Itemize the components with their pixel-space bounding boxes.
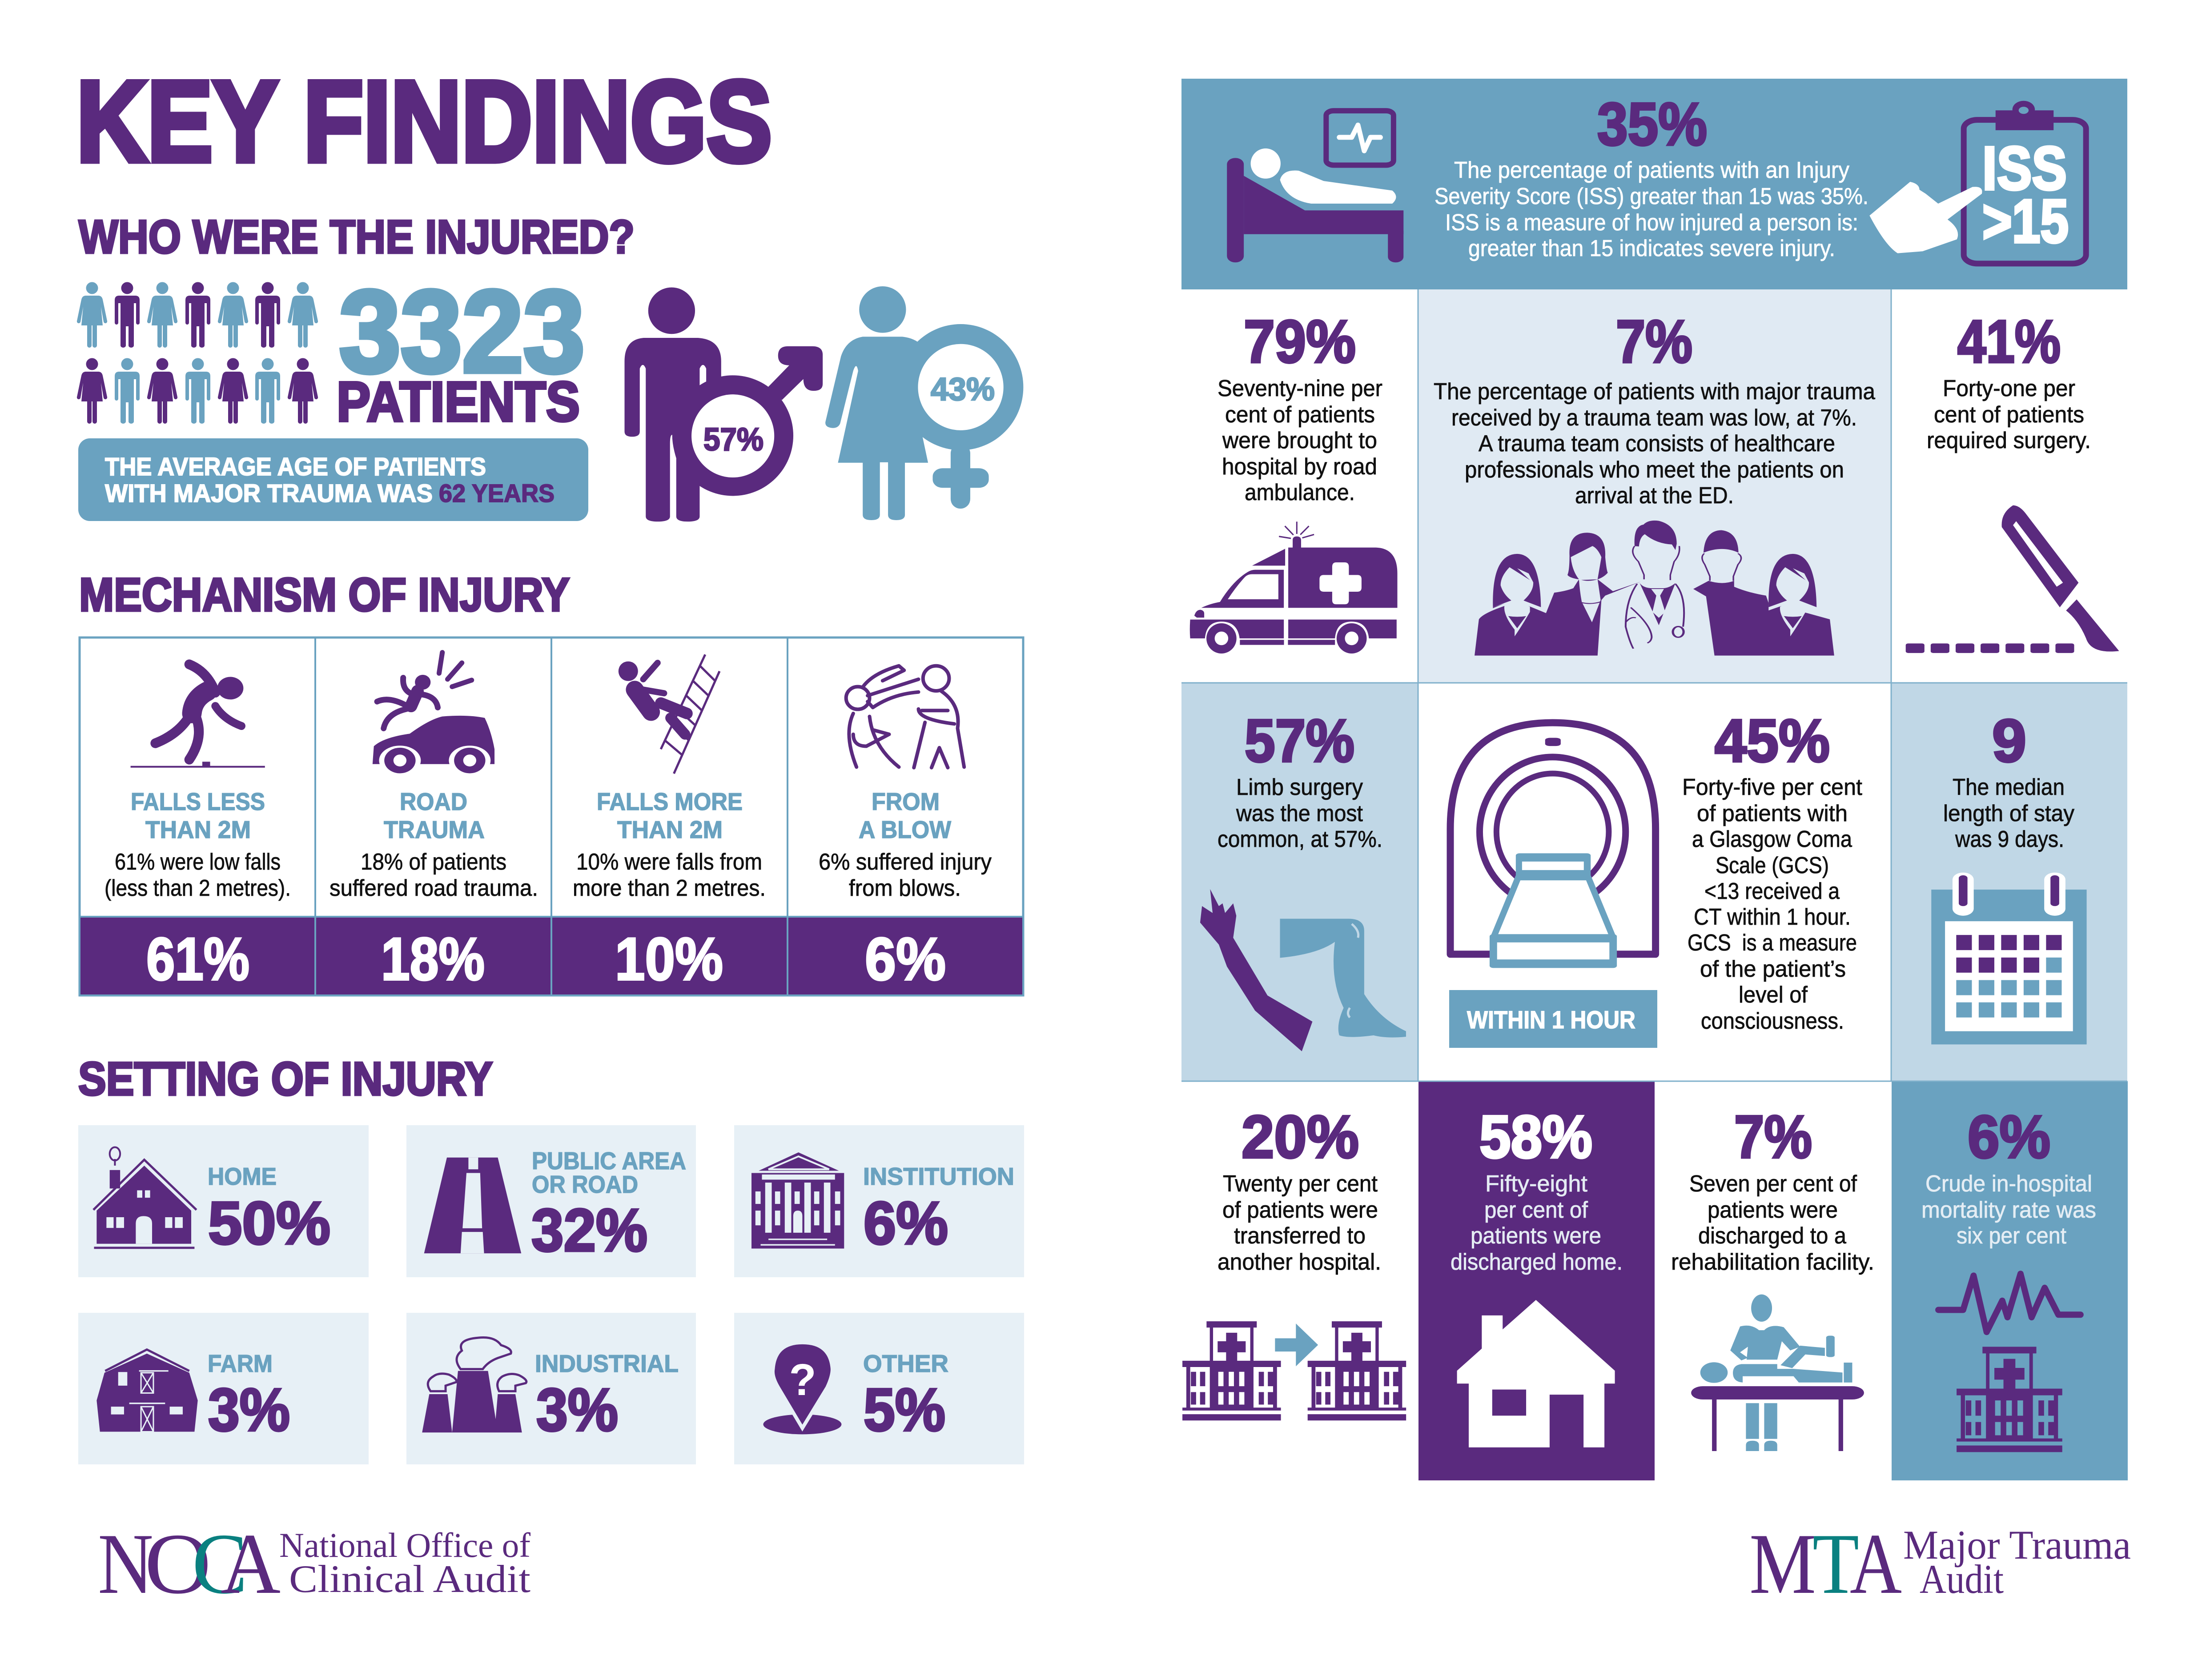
text: CT description: a Glasgow Coma — [1692, 826, 1852, 852]
column text: from a blow — [819, 788, 992, 901]
card: public area or road — [406, 1125, 696, 1277]
icon: clipboard ISS >15 — [1869, 101, 2086, 264]
mechanism percentages: 6% — [865, 925, 946, 993]
card: other: OTHER — [863, 1350, 948, 1377]
text: limb surgery description — [1218, 774, 1382, 852]
text: transfer description: of patients were — [1222, 1197, 1378, 1223]
text: discharged home description — [1451, 1171, 1623, 1275]
logo: NOCA: C — [192, 1516, 248, 1612]
panel: 20% transferred — [1182, 1103, 1406, 1420]
text: ambulance description: ambulance. — [1245, 480, 1355, 505]
panel: 79% ambulance: 79% — [1244, 308, 1356, 375]
heading: who were the injured: WHO WERE THE INJURED? — [79, 211, 635, 263]
card: industrial — [406, 1313, 696, 1464]
text: discharged home description: patients were — [1471, 1223, 1601, 1249]
icon: road trauma — [373, 653, 494, 775]
mechanism percentages — [146, 925, 946, 993]
card: public area or road: 32% — [531, 1196, 647, 1264]
text: CT description: GCS is a measure — [1688, 930, 1857, 956]
panel: 58% discharged home: 58% — [1479, 1103, 1592, 1171]
pictogram: rows of patients — [77, 282, 318, 424]
text: transfer description — [1218, 1171, 1381, 1275]
title: KEY FINDINGS — [76, 57, 772, 185]
column text: from a blow: FROM — [872, 788, 940, 815]
mechanism percentages: 61% — [146, 925, 249, 993]
icon: ambulance — [1190, 521, 1397, 654]
text: ISS description: The percentage of patients with an Injury — [1454, 157, 1849, 183]
icon: a blow — [846, 666, 964, 768]
text: discharged home description: per cent of — [1484, 1197, 1588, 1223]
logo: MTA: T — [1812, 1516, 1859, 1612]
logo: NOCA: O — [145, 1516, 211, 1612]
card: institution — [734, 1125, 1024, 1277]
label: within 1 hour — [1449, 990, 1657, 1048]
text: trauma team description: professionals who meet the patients on — [1465, 457, 1844, 483]
text: discharged home description: Fifty-eight — [1485, 1171, 1588, 1197]
text: CT description: Forty-five per cent — [1682, 774, 1863, 800]
column text: falls less than 2m: (less than 2 metres). — [104, 875, 291, 901]
icon: ECG trace and hospital — [1938, 1274, 2081, 1452]
text: trauma team description: The percentage of patients with major trauma — [1434, 379, 1875, 405]
card: farm — [78, 1313, 369, 1464]
card: farm: 3% — [208, 1376, 290, 1443]
icon: CT scanner — [1451, 723, 1656, 968]
icon: clipboard ISS >15: >15 — [1982, 187, 2069, 256]
text: ambulance description — [1218, 376, 1382, 505]
text: CT description: of patients with — [1697, 801, 1848, 826]
text: limb surgery description: Limb surgery — [1236, 774, 1363, 800]
text: ISS description: ISS is a measure of how injured a person is: — [1445, 210, 1858, 236]
text: transfer description: transferred to — [1234, 1223, 1366, 1249]
icon: physiotherapy — [1691, 1295, 1864, 1451]
logo: MTA: Audit — [1920, 1556, 2004, 1602]
card: home — [78, 1125, 369, 1277]
text: surgery description: required surgery. — [1927, 428, 2091, 453]
text: transfer description: another hospital. — [1218, 1249, 1381, 1275]
text: CT description: Scale (GCS) — [1716, 853, 1829, 878]
column text: falls less than 2m: FALLS LESS — [131, 788, 265, 815]
icon: fall from ladder — [619, 654, 719, 774]
mechanism percentages: 18% — [381, 925, 485, 993]
text: ISS description: greater than 15 indicates severe injury. — [1468, 236, 1835, 261]
card: public area or road: OR ROAD — [532, 1171, 638, 1198]
panel: 6% mortality — [1921, 1103, 2096, 1452]
text: transfer description: Twenty per cent — [1223, 1171, 1378, 1197]
panel: 9 days length of stay — [1931, 707, 2087, 1044]
icon: clipboard ISS >15: ISS — [1982, 134, 2067, 203]
panel: 9 days length of stay: 9 — [1992, 707, 2026, 774]
column text: road trauma: suffered road trauma. — [329, 875, 538, 901]
callout: average age: 62 YEARS — [439, 479, 555, 508]
icon: scalpel — [1906, 505, 2119, 653]
text: length of stay description: was 9 days. — [1955, 826, 2064, 852]
text: rehabilitation description: patients were — [1708, 1197, 1838, 1223]
text: trauma team description: arrival at the ED. — [1575, 483, 1734, 509]
logo: NOCA: National Office of — [279, 1526, 530, 1564]
column text: falls more than 2m: 10% were falls from — [576, 849, 762, 875]
card: other — [734, 1313, 1024, 1464]
text: length of stay description: length of stay — [1943, 801, 2074, 826]
icon: arm and leg — [1200, 889, 1406, 1051]
callout: average age: WITH MAJOR TRAUMA WAS — [105, 479, 433, 508]
card: institution: 6% — [864, 1189, 948, 1257]
card: industrial: 3% — [536, 1376, 618, 1443]
text: surgery description: Forty-one per — [1943, 376, 2075, 401]
column text: from a blow: A BLOW — [859, 816, 951, 843]
text: ambulance description: hospital by road — [1222, 454, 1377, 480]
panel: 7% rehabilitation — [1671, 1103, 1874, 1451]
text: CT description — [1682, 774, 1863, 1034]
text: limb surgery description: was the most — [1236, 801, 1363, 826]
text: mortality description: mortality rate was — [1921, 1197, 2096, 1223]
text: limb surgery description: common, at 57%. — [1218, 826, 1382, 852]
column text: falls more than 2m: FALLS MORE — [597, 788, 743, 815]
text: mortality description — [1921, 1171, 2096, 1249]
text: CT description: CT within 1 hour. — [1694, 904, 1851, 930]
panel: 7% trauma team — [1434, 308, 1875, 656]
heading: setting of injury: SETTING OF INJURY — [78, 1053, 493, 1105]
text: trauma team description: A trauma team consists of healthcare — [1479, 431, 1835, 457]
text: CT description: <13 received a — [1704, 878, 1840, 904]
icon: house — [1457, 1300, 1615, 1447]
text: mortality description: Crude in-hospital — [1925, 1171, 2092, 1197]
text: trauma team description — [1434, 379, 1875, 509]
text: discharged home description: discharged home. — [1451, 1249, 1623, 1275]
card: other: ? — [789, 1355, 816, 1405]
logo: NOCA — [98, 1516, 530, 1612]
icon: female figure 43% — [825, 286, 1023, 520]
icon: hospital transfer — [1182, 1321, 1406, 1420]
panel: 41% surgery — [1906, 308, 2119, 653]
text: surgery description: cent of patients — [1934, 402, 2084, 428]
logo: MTA — [1749, 1516, 2131, 1612]
column text: falls less than 2m: THAN 2M — [145, 816, 251, 843]
panel: 58% discharged home — [1451, 1103, 1623, 1447]
logo: NOCA: A — [221, 1516, 281, 1612]
text: ISS description — [1435, 157, 1868, 261]
panel: 79% ambulance — [1190, 308, 1397, 654]
text: rehabilitation description — [1671, 1171, 1874, 1275]
icon: calendar — [1931, 873, 2087, 1044]
text: ISS description: Severity Score (ISS) greater than 15 was 35%. — [1435, 184, 1868, 209]
text: mortality description: six per cent — [1957, 1223, 2067, 1249]
icon: male figure 57%: 57% — [703, 422, 763, 457]
text: length of stay description: The median — [1953, 774, 2065, 800]
icon: female figure 43%: 43% — [931, 372, 995, 407]
column text: falls less than 2m — [104, 788, 291, 901]
panel: 57% limb surgery: 57% — [1245, 707, 1354, 774]
text: CT description: consciousness. — [1701, 1008, 1844, 1034]
card: public area or road: PUBLIC AREA — [532, 1147, 686, 1175]
logo: MTA: Major Trauma — [1903, 1522, 2131, 1568]
text: CT description: of the patient’s — [1700, 956, 1846, 982]
card: farm: FARM — [208, 1350, 273, 1377]
panel: 35% ISS — [1181, 79, 2127, 289]
panel: 45% CT scan — [1449, 707, 1863, 1048]
card: other: 5% — [864, 1376, 945, 1443]
heading: mechanism of injury: MECHANISM OF INJURY — [79, 569, 570, 621]
icon: male figure 57% — [624, 288, 823, 521]
patient count: PATIENTS — [337, 370, 580, 433]
column text: from a blow: 6% suffered injury — [819, 849, 992, 875]
column text: falls less than 2m: 61% were low falls — [115, 849, 281, 875]
logo: MTA: M — [1749, 1516, 1816, 1612]
column text: falls more than 2m: more than 2 metres. — [573, 875, 766, 901]
text: surgery description — [1927, 376, 2091, 453]
panel: mechanism table — [80, 638, 1023, 995]
text: CT description: level of — [1739, 982, 1808, 1008]
card: industrial: INDUSTRIAL — [535, 1350, 679, 1377]
column text: road trauma: ROAD — [400, 788, 467, 815]
panel: 6% mortality: 6% — [1968, 1103, 2050, 1171]
text: rehabilitation description: discharged to a — [1698, 1223, 1846, 1249]
logo: NOCA: N — [98, 1516, 153, 1612]
card: home: HOME — [208, 1163, 277, 1190]
panel: right grid backgrounds — [1181, 289, 2128, 1480]
panel: 41% surgery: 41% — [1957, 308, 2061, 375]
column text: falls more than 2m: THAN 2M — [617, 816, 723, 843]
text: trauma team description: received by a trauma team was low, at 7%. — [1451, 405, 1857, 431]
panel: 7% trauma team: 7% — [1616, 308, 1692, 375]
card: home: 50% — [208, 1189, 330, 1257]
card: institution: INSTITUTION — [863, 1163, 1014, 1190]
panel: 7% rehabilitation: 7% — [1734, 1103, 1812, 1171]
column text: from a blow: from blows. — [849, 875, 961, 901]
icon: low fall — [131, 664, 265, 768]
logo: NOCA: Clinical Audit — [289, 1558, 530, 1601]
text: rehabilitation description: Seven per cent of — [1689, 1171, 1857, 1197]
column text: road trauma: TRAUMA — [384, 816, 485, 843]
mechanism percentages: 10% — [615, 925, 723, 993]
panel: 57% limb surgery — [1200, 707, 1406, 1051]
patient count: 3323 — [339, 266, 585, 397]
logo: MTA: A — [1850, 1516, 1902, 1612]
text: ambulance description: Seventy-nine per — [1218, 376, 1382, 401]
panel: 20% transferred: 20% — [1242, 1103, 1359, 1171]
column text: road trauma — [329, 788, 538, 901]
column text: road trauma: 18% of patients — [361, 849, 506, 875]
label: within 1 hour: WITHIN 1 HOUR — [1467, 1006, 1635, 1034]
text: length of stay description — [1943, 774, 2074, 852]
icon: trauma team — [1475, 521, 1834, 656]
column text: falls more than 2m — [573, 788, 766, 901]
text: ambulance description: were brought to — [1222, 428, 1377, 453]
callout: average age: THE AVERAGE AGE OF PATIENTS — [105, 453, 486, 481]
text: 45% figure: 45% — [1715, 707, 1830, 774]
text: rehabilitation description: rehabilitation facility. — [1671, 1249, 1874, 1275]
callout: average age — [78, 438, 588, 521]
text: 35% figure: 35% — [1597, 90, 1707, 158]
icon: hospital bed and monitor — [1227, 111, 1403, 262]
text: ambulance description: cent of patients — [1225, 402, 1375, 428]
